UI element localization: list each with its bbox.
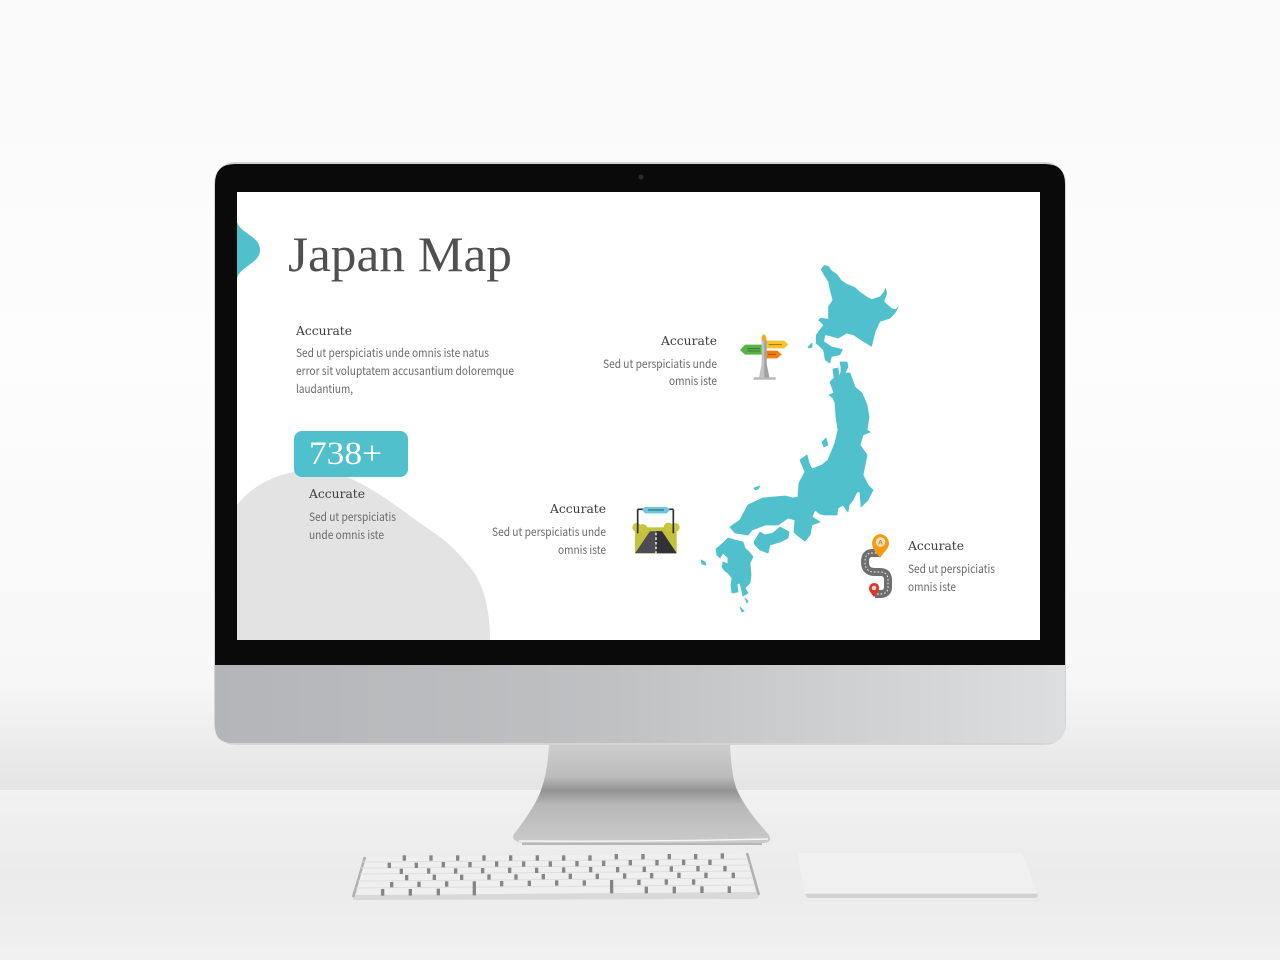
text block: route	[907, 539, 995, 595]
monitor body	[214, 162, 1066, 745]
text block: route: Accurate	[907, 539, 964, 553]
text block: signpost: Accurate	[660, 334, 717, 348]
kyushu	[716, 538, 753, 596]
okushiri island	[808, 343, 812, 348]
text block: top left: error sit voluptatem accusantium doloremque	[296, 363, 514, 379]
icon: winding route with pins	[865, 534, 889, 597]
text block: under stat: Accurate	[308, 487, 365, 501]
sado island	[822, 438, 828, 447]
honshu	[730, 362, 873, 541]
teal tab	[237, 222, 260, 278]
shikoku	[754, 527, 789, 553]
text block: under stat: unde omnis iste	[309, 527, 384, 543]
oki islands	[754, 486, 760, 490]
text block: signpost: omnis iste	[669, 373, 717, 389]
icon: road with banner	[632, 507, 680, 553]
text block: route: Sed ut perspiciatis	[908, 561, 995, 577]
text block: top left	[295, 324, 514, 397]
screen: slide	[237, 192, 1040, 640]
japan map	[701, 265, 899, 612]
southern islands	[701, 560, 748, 612]
text block: road	[492, 502, 606, 558]
text block: under stat	[308, 487, 396, 543]
text block: route: omnis iste	[908, 579, 956, 595]
text block: under stat: Sed ut perspiciatis	[309, 509, 396, 525]
keyboard	[353, 853, 759, 900]
trackpad	[797, 853, 1038, 898]
text block: signpost	[603, 334, 717, 389]
hokkaido	[816, 265, 899, 363]
icon: signpost	[740, 334, 788, 380]
keyboard key gaps	[381, 853, 735, 896]
text block: top left: laudantium,	[296, 381, 353, 397]
text block: road: Sed ut perspiciatis unde	[492, 524, 606, 540]
title: Japan Map	[288, 226, 512, 282]
decorative grey blob	[237, 470, 490, 640]
text block: road: omnis iste	[558, 542, 606, 558]
text block: road: Accurate	[549, 502, 606, 516]
text block: top left: Accurate	[295, 324, 352, 338]
stat badge: 738+: 738+	[309, 436, 382, 472]
monitor stand	[513, 744, 770, 844]
text block: signpost: Sed ut perspiciatis unde	[603, 356, 717, 372]
stat badge: 738+	[294, 431, 408, 477]
text block: top left: Sed ut perspiciatis unde omnis iste natus	[296, 345, 489, 361]
icon: winding route with pins: A	[878, 540, 883, 546]
